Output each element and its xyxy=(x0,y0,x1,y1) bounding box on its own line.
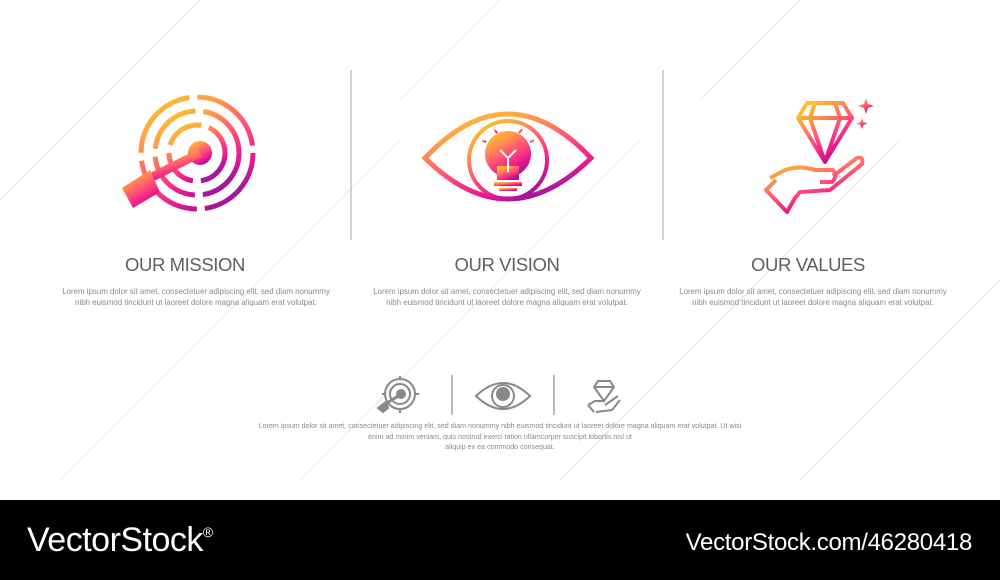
footer brand: ® xyxy=(203,524,214,540)
text: bottom paragraph xyxy=(259,422,741,451)
text: values xyxy=(679,287,947,307)
icon: target xyxy=(122,95,257,213)
footer bar xyxy=(0,500,1000,580)
heading: values: OUR VALUES xyxy=(751,254,865,275)
text: vision: nibh euismod tincidunt ut laoreet dolore magna aliquam erat volutpat. xyxy=(386,298,628,307)
divider xyxy=(350,70,352,240)
text: values: Lorem ipsum dolor sit amet, consectetuer adipiscing elit, sed diam nonummy xyxy=(679,287,947,296)
bottom small icons xyxy=(378,376,620,413)
text: vision: Lorem ipsum dolor sit amet, consectetuer adipiscing elit, sed diam nonummy xyxy=(373,287,641,296)
text: bottom paragraph: aliquip ex ea commodo consequat. xyxy=(445,443,555,451)
text: mission: nibh euismod tincidunt ut laoreet dolore magna aliquam erat volutpat. xyxy=(75,298,317,307)
footer brand: VectorStock xyxy=(27,521,203,559)
text: bottom paragraph: Lorem ipsum dolor sit amet, consectetuer adipiscing elit, sed diam nonummy nibh euismod tincidunt ut laoreet dolore magna aliquam erat volutpat. Ut wisi xyxy=(259,422,741,430)
text: bottom paragraph: enim ad minim veniam, quis nostrud exerci tation ullamcorper suscipit lobortis nisl ut xyxy=(368,432,632,440)
icon: diamond hand xyxy=(766,98,874,212)
text: mission: Lorem ipsum dolor sit amet, consectetuer adipiscing elit, sed diam nonummy xyxy=(62,287,330,296)
text: vision xyxy=(373,287,641,307)
text: mission xyxy=(62,287,330,307)
heading: vision: OUR VISION xyxy=(455,254,559,275)
heading: mission: OUR MISSION xyxy=(125,254,245,275)
divider xyxy=(662,70,664,240)
footer url: VectorStock.com/46280418 xyxy=(686,529,972,556)
text: values: nibh euismod tincidunt ut laoreet dolore magna aliquam erat volutpat. xyxy=(692,298,934,307)
icon: eye xyxy=(425,114,591,199)
